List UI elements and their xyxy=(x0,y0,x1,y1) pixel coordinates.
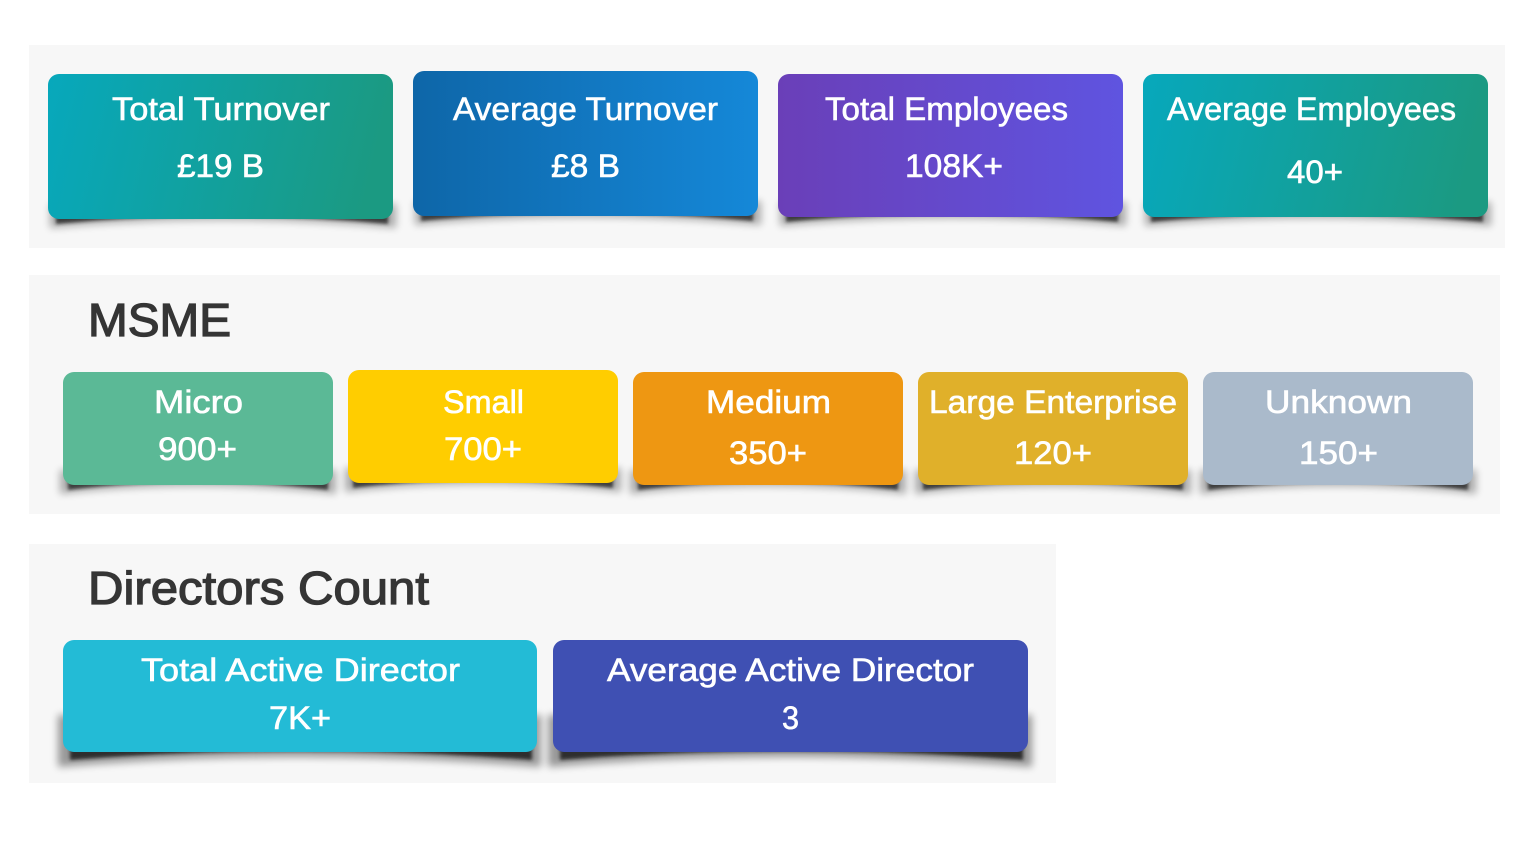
card: large enterprise xyxy=(915,372,1191,494)
card: large enterprise: Large Enterprise xyxy=(929,384,1177,420)
card: average active director xyxy=(548,640,1032,767)
card: total turnover: £19 B xyxy=(177,148,264,184)
card: micro: 900+ xyxy=(158,431,237,467)
panel: company totals xyxy=(29,45,1505,248)
card: total employees: Total Employees xyxy=(825,91,1068,127)
card: total turnover: Total Turnover xyxy=(112,91,330,127)
card: average turnover: Average Turnover xyxy=(453,91,718,127)
card: total turnover xyxy=(48,74,396,228)
heading: MSME: MSME xyxy=(88,294,231,346)
card: micro xyxy=(60,372,336,494)
card: average employees: Average Employees xyxy=(1167,91,1456,127)
card: medium: Medium xyxy=(706,384,831,420)
heading: directors count: Directors Count xyxy=(88,562,429,614)
card: total employees: 108K+ xyxy=(905,148,1003,184)
card: medium xyxy=(630,372,906,494)
card: medium: 350+ xyxy=(729,435,807,471)
panel: MSME xyxy=(29,275,1500,514)
card: total active director: Total Active Director xyxy=(141,652,460,688)
card: large enterprise: 120+ xyxy=(1014,435,1092,471)
card: unknown: Unknown xyxy=(1265,384,1412,420)
card: unknown xyxy=(1200,372,1476,494)
card: total employees xyxy=(778,74,1126,226)
panel: directors count xyxy=(29,544,1056,783)
card: average active director: 3 xyxy=(782,700,799,736)
card: small xyxy=(345,370,621,492)
card: total active director: 7K+ xyxy=(269,700,331,736)
card: average employees: 40+ xyxy=(1287,154,1343,190)
card: small: 700+ xyxy=(444,431,522,467)
card: micro: Micro xyxy=(154,384,243,420)
card: total active director xyxy=(58,640,541,767)
card: average turnover xyxy=(413,71,761,225)
card: average turnover: £8 B xyxy=(551,148,620,184)
card: unknown: 150+ xyxy=(1299,435,1378,471)
card: small: Small xyxy=(443,384,524,420)
card: average employees xyxy=(1143,74,1491,226)
card: average active director: Average Active Director xyxy=(607,652,974,688)
